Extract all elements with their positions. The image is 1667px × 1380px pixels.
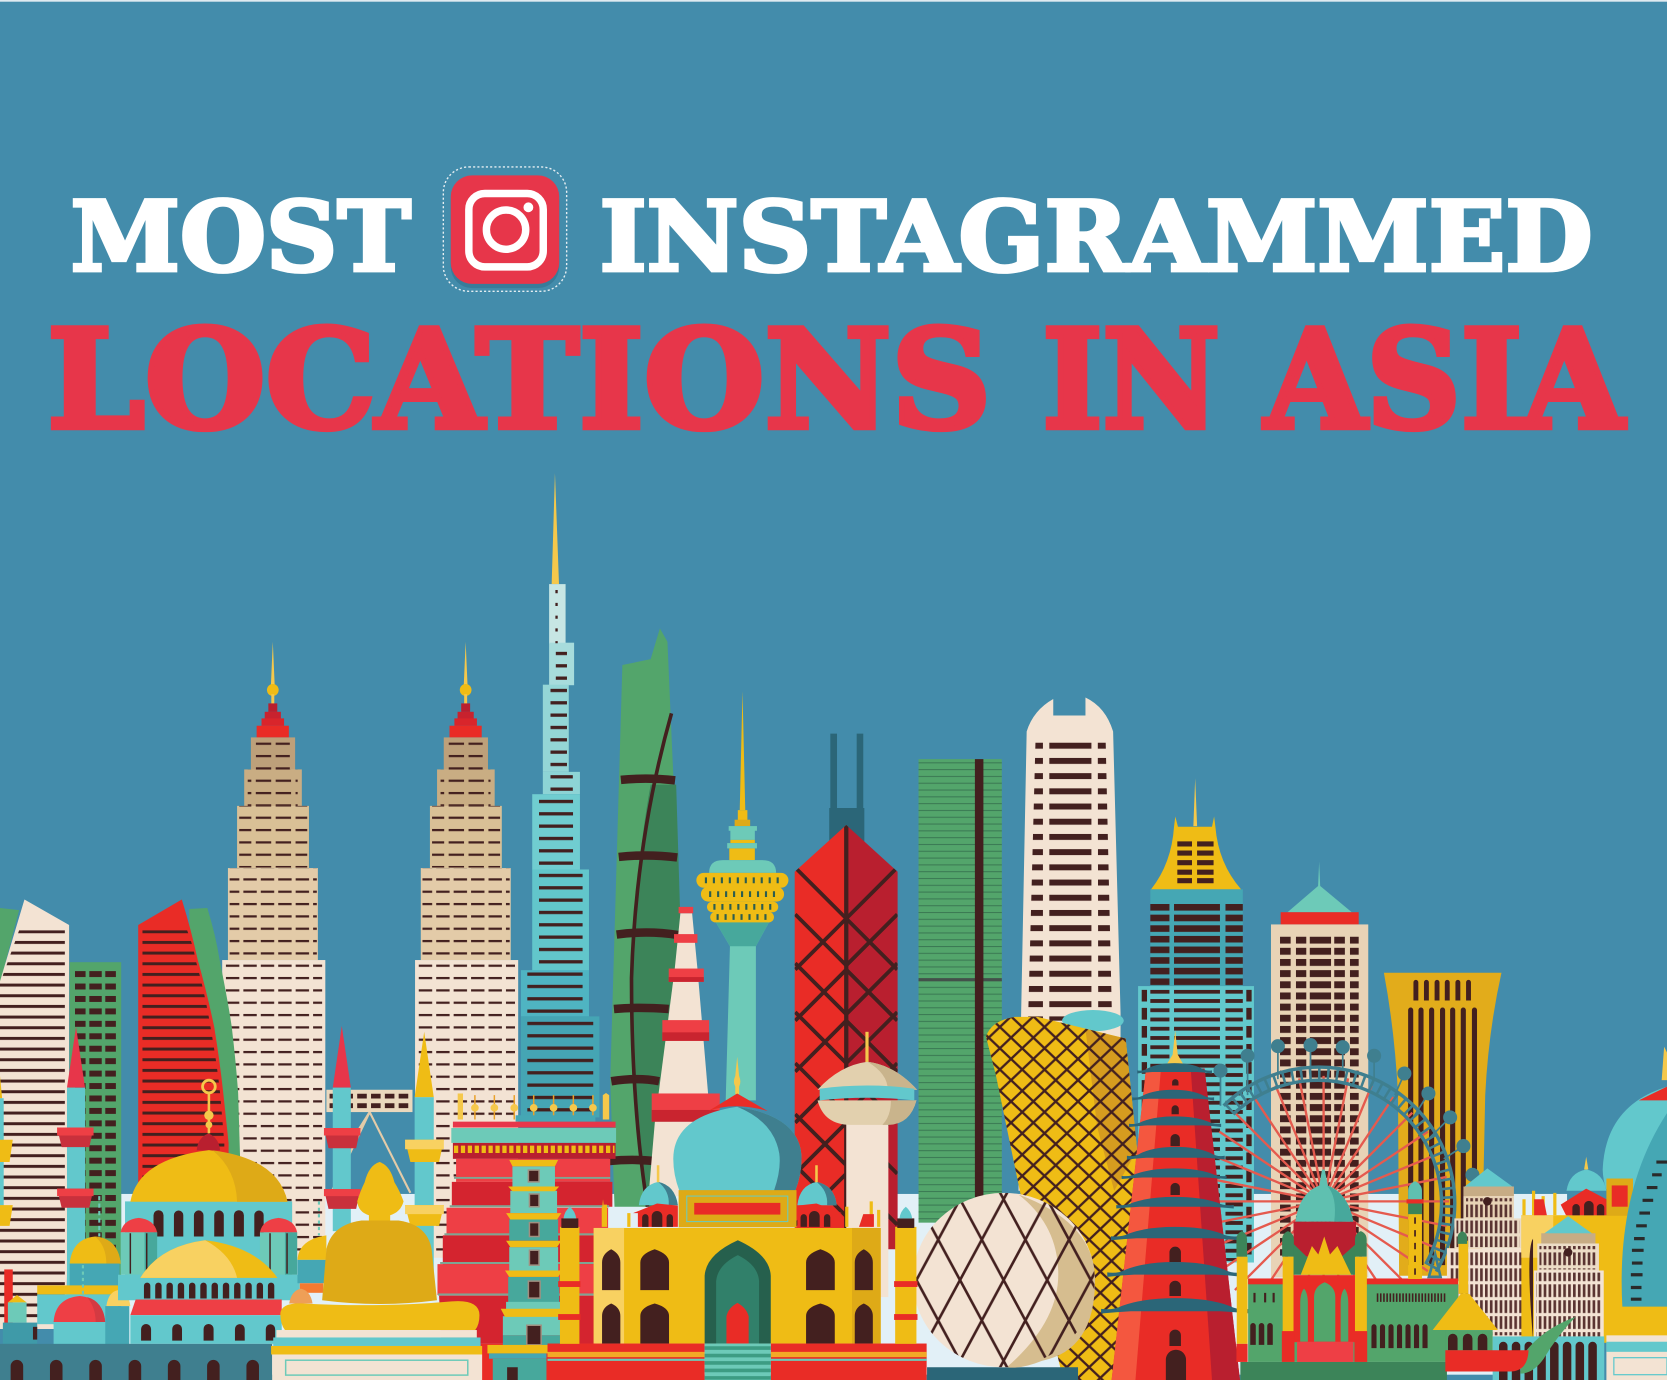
- building: white notched tower: [1018, 697, 1121, 1191]
- skybridge: [326, 1090, 412, 1196]
- icon: instagram logo: [443, 167, 567, 291]
- building: observation tower: [818, 1032, 917, 1297]
- skyline illustration: [0, 473, 1667, 1380]
- building: lattice sphere: [913, 1193, 1095, 1380]
- boat: [1445, 1317, 1576, 1374]
- building: red flame tower: [138, 899, 240, 1212]
- landmark: red gopuram temple: [437, 1093, 616, 1380]
- landmark: right yellow mosque: [1521, 1047, 1667, 1343]
- landmark: green colonial palace: [1236, 1169, 1498, 1380]
- building: bank of china tower: [795, 734, 898, 1250]
- heading: locations in asia: IN: [1042, 300, 1220, 460]
- building: yellow hat tower: [1138, 778, 1254, 1263]
- title: [47, 167, 1626, 460]
- heading: instagrammed: INSTAGRAMMED: [600, 180, 1593, 294]
- building: burj khalifa: [521, 473, 599, 1117]
- building: red pagoda: [1101, 1030, 1250, 1380]
- landmark: bottom right pedestal: [1606, 1335, 1667, 1380]
- small domes behind buddha: [289, 1201, 326, 1303]
- building: kl tower: [696, 691, 788, 1100]
- building: beige office block back: [1447, 1168, 1530, 1337]
- landmark: green gopuram tower: [487, 1160, 567, 1380]
- landmark: ferris wheel: [1198, 1038, 1667, 1327]
- building: left slanted tower: [0, 899, 69, 1329]
- building: dark green block: [70, 962, 121, 1281]
- landmark: left mosque minarets: [0, 1026, 444, 1327]
- building: petronas left tower: [222, 642, 325, 1258]
- building: beige office block front: [1493, 1216, 1604, 1380]
- building: qutb minar: [649, 907, 720, 1196]
- building: green glass tower: [919, 759, 1002, 1223]
- heading: most: MOST: [71, 180, 411, 294]
- heading: locations in asia: LOCATIONS: [47, 300, 991, 460]
- building: aldar diagonal lattice tower: [986, 1010, 1137, 1380]
- building: beige tower: [1271, 862, 1368, 1277]
- heading: locations in asia: [47, 300, 1626, 460]
- landmark: blue mosque: [0, 1080, 300, 1380]
- building: twisted green tower: [609, 628, 681, 1207]
- landmark: taj mahal: [548, 1057, 927, 1380]
- heading: locations in asia: ASIA: [1263, 300, 1626, 460]
- building: petronas right tower: [415, 642, 518, 1258]
- building: buddha statue: [271, 1162, 482, 1380]
- building: gold flared tower: [1384, 973, 1501, 1276]
